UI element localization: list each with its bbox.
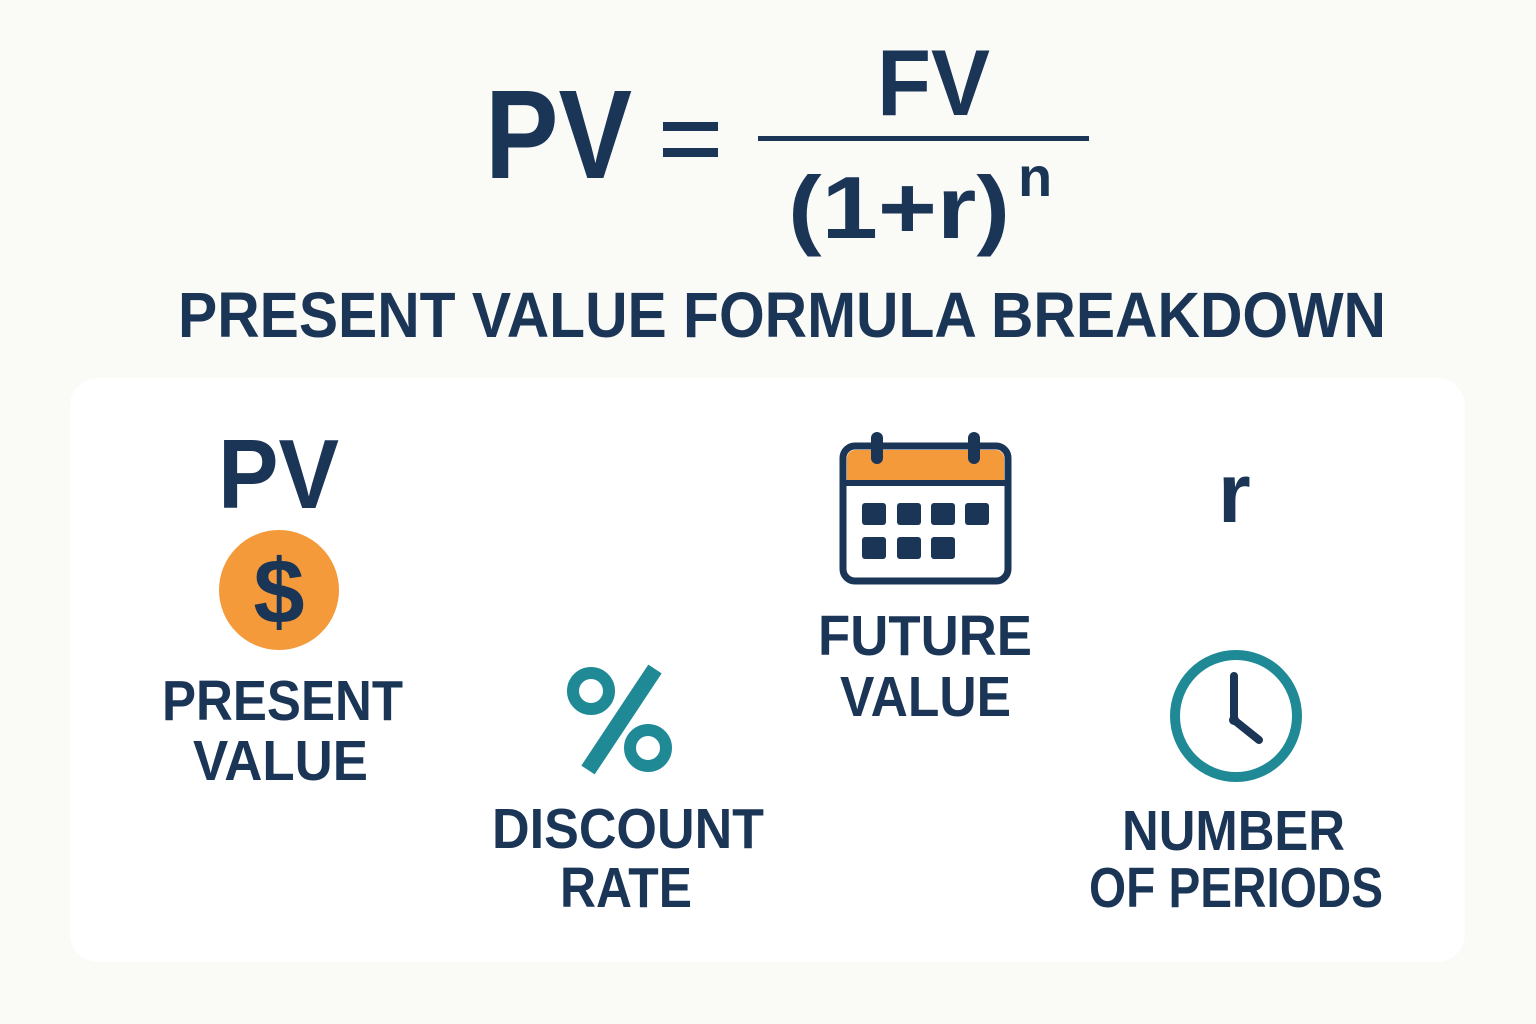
title: PRESENT VALUE FORMULA BREAKDOWN: [178, 279, 1386, 351]
formula: (1+r): [788, 158, 1010, 257]
item: present value: PRESENT: [162, 669, 403, 733]
icon: clock: [1175, 655, 1297, 777]
item: present value: PV: [218, 419, 339, 529]
item: discount rate: DISCOUNT: [492, 797, 764, 861]
formula: PV: [485, 64, 632, 205]
item: present value: [162, 419, 403, 793]
item: future value: VALUE: [840, 665, 1011, 729]
item: number of periods: NUMBER: [1122, 799, 1345, 863]
item: present value: VALUE: [193, 729, 368, 793]
item: number of periods: r: [1218, 446, 1251, 540]
item: future value: [818, 432, 1032, 729]
formula: n: [1018, 145, 1052, 208]
icon: dollar coin: $: [253, 541, 305, 643]
icon: calendar: [843, 432, 1008, 581]
formula: FV: [877, 30, 990, 135]
formula: [485, 30, 1089, 257]
item: number of periods: OF PERIODS: [1089, 856, 1383, 920]
panel: breakdown: [70, 378, 1465, 962]
item: future value: FUTURE: [818, 604, 1032, 668]
item: discount rate: [492, 669, 764, 920]
item: discount rate: RATE: [560, 856, 692, 920]
item: number of periods: [1089, 446, 1383, 920]
icon: dollar coin: [219, 530, 339, 650]
icon: percent: [573, 669, 666, 770]
